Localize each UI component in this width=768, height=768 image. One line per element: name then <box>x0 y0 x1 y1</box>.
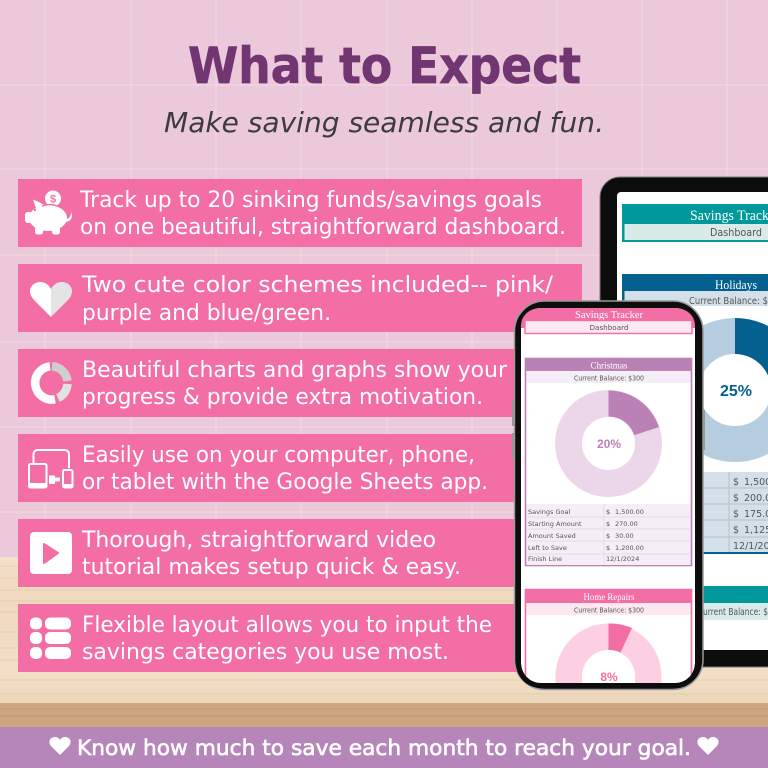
christmas table: Finish Line <box>528 555 562 563</box>
phone header: Savings Tracker <box>575 310 644 321</box>
christmas table: $ <box>606 532 610 540</box>
christmas table <box>526 504 690 565</box>
christmas table: 1,200.00 <box>615 544 644 552</box>
tablet mockup <box>600 177 768 667</box>
christmas panel: Christmas <box>590 360 628 370</box>
tablet second panel <box>690 586 768 620</box>
home repairs panel: Home Repairs <box>584 592 635 602</box>
text <box>82 358 508 410</box>
christmas table: 270.00 <box>615 520 638 528</box>
text: Beautiful charts and graphs show your <box>82 358 508 383</box>
footer banner <box>0 727 768 768</box>
text: on one beautiful, straightforward dashboard. <box>80 215 566 240</box>
feature row 3 <box>18 349 582 417</box>
icon: piggy bank: $ <box>50 194 56 206</box>
donut chart 20% <box>568 390 659 484</box>
icon: piggy bank <box>25 190 72 234</box>
icon: play button <box>30 532 72 574</box>
text: progress & provide extra motivation. <box>82 385 483 410</box>
tablet table <box>690 472 768 553</box>
christmas table: Left to Save <box>528 544 567 552</box>
home repairs panel: Current Balance: $300 <box>574 606 644 614</box>
icon: right heart <box>697 737 719 755</box>
donut chart 25% <box>681 318 768 444</box>
christmas table: Amount Saved <box>528 532 576 540</box>
text <box>82 443 488 495</box>
christmas table: $ <box>606 520 610 528</box>
feature row 4 <box>18 434 582 502</box>
home repairs panel <box>525 589 692 684</box>
footer text: Know how much to save each month to reach your goal. <box>77 736 691 761</box>
text: Thorough, straightforward video <box>81 528 436 553</box>
wooden table <box>0 557 768 727</box>
christmas table: $ <box>606 544 610 552</box>
christmas table: 30.00 <box>615 532 634 540</box>
text <box>79 188 566 240</box>
christmas table: 12/1/2024 <box>606 555 639 563</box>
feature row 6 <box>18 604 582 672</box>
icon: devices <box>29 450 72 488</box>
christmas table: Savings Goal <box>528 508 570 516</box>
feature row 2 <box>18 264 582 332</box>
tablet table: $ <box>733 525 739 536</box>
text: Track up to 20 sinking funds/savings goals <box>79 188 542 213</box>
tablet header <box>622 204 768 242</box>
phone mockup <box>512 301 705 690</box>
christmas table: 1,500.00 <box>615 508 644 516</box>
text: tutorial makes setup quick & easy. <box>82 555 461 580</box>
phone header: Dashboard <box>590 323 628 332</box>
text: or tablet with the Google Sheets app. <box>82 470 488 495</box>
phone bezel lower edge <box>516 660 701 688</box>
christmas panel <box>525 358 692 566</box>
donut chart 20%: 20% <box>597 437 621 451</box>
background wall <box>0 0 768 560</box>
tablet header: Dashboard <box>710 227 762 239</box>
feature row 5 <box>18 519 582 587</box>
text <box>81 273 554 326</box>
text <box>81 528 461 580</box>
title: What to Expect <box>188 37 581 95</box>
icon: list layout <box>30 618 71 659</box>
tablet table: $ <box>733 477 739 488</box>
christmas panel: Current Balance: $300 <box>574 374 644 382</box>
text: Two cute color schemes included-- pink/ <box>81 273 554 298</box>
icon: left heart <box>49 737 71 755</box>
tablet holidays panel <box>622 274 768 553</box>
tablet table: $ <box>733 493 739 504</box>
donut chart 8% <box>556 623 662 684</box>
christmas table: Starting Amount <box>528 520 582 528</box>
icon: donut chart <box>35 366 68 400</box>
text: purple and blue/green. <box>82 301 331 326</box>
text <box>82 613 492 665</box>
subtitle: Make saving seamless and fun. <box>164 106 604 139</box>
tablet holidays panel: Holidays <box>715 278 757 292</box>
donut chart 25%: 25% <box>720 383 752 400</box>
text: savings categories you use most. <box>82 640 449 665</box>
text: Easily use on your computer, phone, <box>82 443 475 468</box>
christmas table: $ <box>606 508 610 516</box>
feature row 1 <box>18 179 582 247</box>
text: Flexible layout allows you to input the <box>82 613 492 638</box>
phone header <box>521 308 695 334</box>
tablet table: $ <box>733 509 739 520</box>
icon: heart <box>30 282 72 317</box>
donut chart 8%: 8% <box>600 670 618 684</box>
